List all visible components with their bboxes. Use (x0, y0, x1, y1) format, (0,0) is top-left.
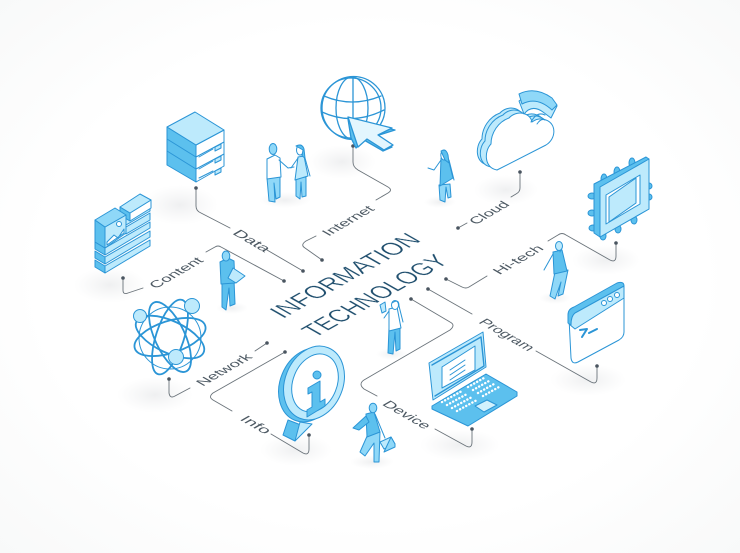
icon: program window (568, 282, 624, 363)
connector: cloud (456, 170, 522, 230)
icon: cloud with wifi (477, 91, 557, 170)
icon: content blocks (95, 194, 151, 273)
person: woman with tablet (428, 150, 454, 202)
connector: data (194, 186, 305, 273)
title: TECHNOLOGY (296, 251, 456, 341)
connector: internet (303, 144, 390, 262)
label: Program: Program (475, 316, 539, 353)
icon: hi-tech chip (588, 157, 652, 240)
person: handshake pair (267, 144, 310, 202)
connector: info (210, 350, 311, 454)
icon: internet globe with cursor (321, 76, 395, 151)
icon: network atom (130, 296, 210, 378)
connector: device (361, 297, 474, 447)
label: Device: Device (379, 398, 435, 431)
label: Data: Data (229, 227, 275, 254)
person: walking man on phone (544, 242, 568, 299)
label: Cloud: Cloud (465, 199, 513, 227)
icon: device laptop (429, 332, 517, 426)
title: INFORMATION (264, 230, 428, 322)
label: Network: Network (192, 351, 256, 388)
connector: hi-tech (444, 234, 618, 288)
connector: network (167, 341, 269, 397)
person: woman with phone (380, 300, 403, 354)
person: man with laptop (220, 251, 245, 310)
connector: content (121, 246, 286, 294)
soft shadows (74, 145, 640, 469)
person: businessman with briefcase (353, 403, 395, 462)
label: Content: Content (145, 255, 207, 291)
icon: data server (167, 112, 224, 182)
label: Hi-tech: Hi-tech (489, 243, 547, 277)
connector: program (426, 287, 599, 383)
label: Info: Info (236, 413, 275, 436)
label: Internet: Internet (318, 203, 378, 238)
icon: info speech bubble (268, 337, 355, 441)
